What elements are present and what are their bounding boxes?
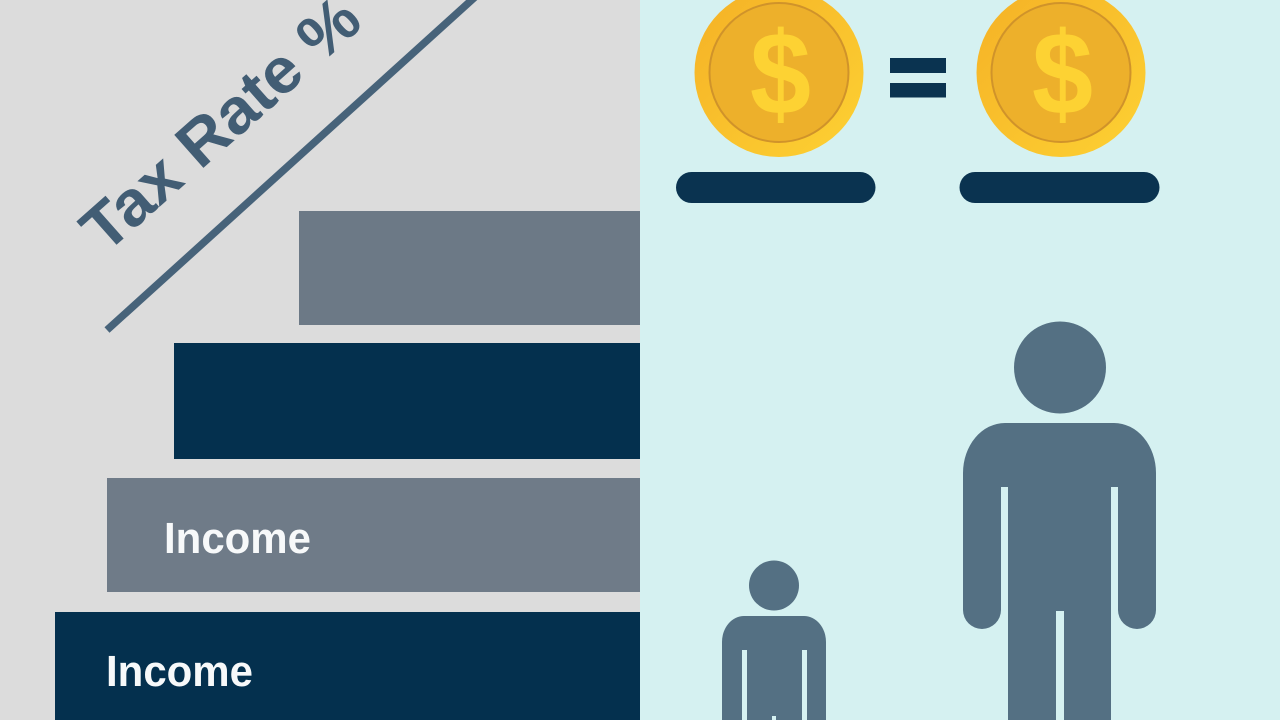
icon: large person xyxy=(963,322,1156,720)
icon: right coin xyxy=(976,0,1146,157)
bar: third bracket with income label: Income xyxy=(164,514,311,563)
icon: right coin: $ xyxy=(1032,8,1093,140)
bar: bottom bracket with income label: Income xyxy=(106,647,253,696)
bar: bottom bracket with income label xyxy=(55,612,640,720)
right pill bar xyxy=(960,172,1160,203)
icon: left coin: $ xyxy=(750,8,811,140)
panel: left progressive tax xyxy=(0,0,640,720)
axis line: tax rate xyxy=(107,0,475,330)
icon: equals sign xyxy=(890,58,946,98)
bar: third bracket with income label xyxy=(107,478,640,592)
panel: right equal value xyxy=(640,0,1280,720)
icon: left coin xyxy=(694,0,864,157)
icon: small person xyxy=(722,560,826,720)
bar: top bracket xyxy=(299,211,640,325)
bar: second bracket xyxy=(174,343,640,459)
left pill bar xyxy=(676,172,876,203)
